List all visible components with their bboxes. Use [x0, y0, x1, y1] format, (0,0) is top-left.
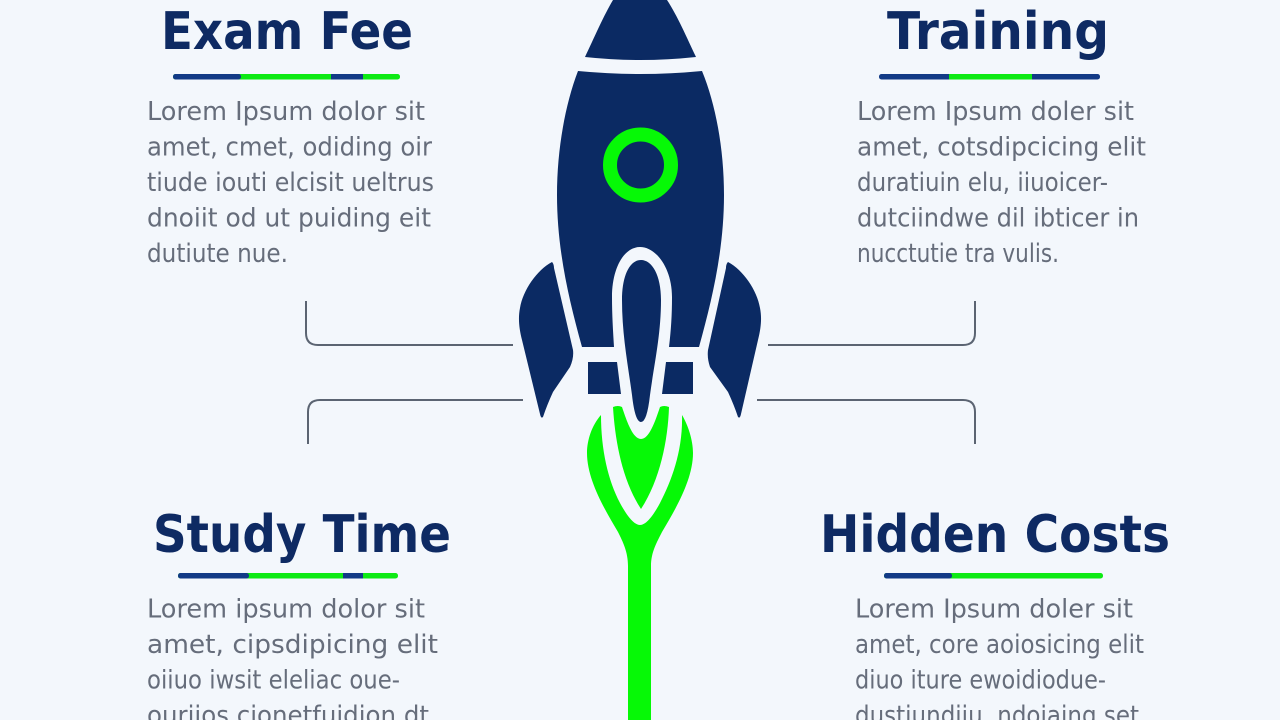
- text: Hidden Costs body: amet, core aoiosicing elit: [855, 630, 1144, 660]
- text: Training body: Lorem Ipsum doler sit: [857, 97, 1134, 127]
- rocket body: [557, 71, 724, 347]
- text: Training body: [857, 97, 1146, 269]
- heading: Exam Fee: Exam Fee: [161, 2, 413, 62]
- underline: Training: [879, 74, 1100, 80]
- text: Exam Fee body: amet, cmet, odiding oir: [147, 132, 432, 162]
- text: Hidden Costs body: Lorem Ipsum doler sit: [855, 594, 1133, 624]
- text: Hidden Costs body: diuo iture ewoidiodue-: [855, 666, 1106, 696]
- text: Exam Fee body: tiude iouti elcisit ueltrus: [147, 168, 434, 198]
- panel: Training: [857, 2, 1146, 269]
- right engine block: [662, 362, 693, 394]
- heading: Training: Training: [887, 2, 1109, 62]
- text: Exam Fee body: Lorem Ipsum dolor sit: [147, 97, 425, 127]
- left engine block: [588, 362, 621, 394]
- text: Exam Fee body: dutiute nue.: [147, 239, 288, 269]
- underline: Hidden Costs: [884, 573, 1103, 578]
- underline: Study Time: [178, 573, 398, 578]
- text: Training body: nucctutie tra vulis.: [857, 239, 1059, 269]
- text: Exam Fee body: dnoiit od ut puiding eit: [147, 204, 431, 234]
- text: Training body: amet, cotsdipcicing elit: [857, 132, 1146, 162]
- text: Training body: duratiuin elu, iiuoicer-: [857, 168, 1108, 198]
- text: Training body: dutciindwe dil ibticer in: [857, 204, 1139, 234]
- text: Study Time body: Lorem ipsum dolor sit: [147, 594, 425, 624]
- rocket illustration: [519, 0, 761, 720]
- panel: Hidden Costs: [820, 505, 1170, 720]
- text: Hidden Costs body: [855, 594, 1144, 720]
- connector: top left: [306, 301, 513, 345]
- rocket window ring: [610, 134, 671, 196]
- panel: Study Time: [147, 505, 451, 720]
- rocket nose cone: [585, 0, 696, 60]
- heading: Hidden Costs: Hidden Costs: [820, 505, 1170, 565]
- text: Study Time body: [147, 594, 438, 720]
- panel: Exam Fee: [147, 2, 434, 269]
- underline: Exam Fee: [173, 74, 400, 80]
- inner flame: [613, 406, 669, 509]
- connector: bottom left: [308, 400, 523, 444]
- left fin: [519, 262, 573, 418]
- rocket flame: [587, 415, 693, 720]
- text: Study Time body: amet, cipsdipicing elit: [147, 630, 438, 660]
- right fin: [708, 262, 761, 418]
- center nozzle: [622, 260, 661, 422]
- connector: bottom right: [757, 400, 975, 444]
- connector: top right: [768, 301, 975, 345]
- text: Exam Fee body: [147, 97, 434, 269]
- text: Study Time body: oiiuo iwsit eleliac oue-: [147, 666, 400, 696]
- heading: Study Time: Study Time: [153, 505, 451, 565]
